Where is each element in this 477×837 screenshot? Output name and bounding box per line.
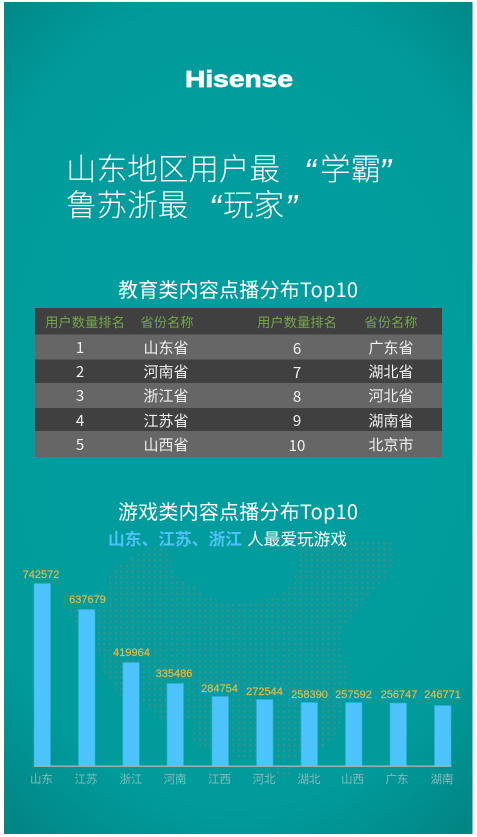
heading: education top 10: 教育类内容点播分布Top10 <box>118 274 358 303</box>
table header: 省份名称 <box>140 312 194 331</box>
axis labels <box>30 771 454 787</box>
title: 玩家 <box>223 181 284 225</box>
title: 山东地区用户最 <box>66 145 280 189</box>
value labels: 258390 <box>291 689 328 701</box>
table header: 省份名称 <box>364 312 418 331</box>
table header: 用户数量排名 <box>257 312 337 331</box>
title: “ <box>209 187 223 228</box>
table rows: 9 <box>293 410 301 431</box>
bars <box>34 584 451 766</box>
table rows: 8 <box>293 386 301 407</box>
table rows: 湖南省 <box>368 410 414 431</box>
table: education ranking <box>35 308 442 457</box>
title: ” <box>285 187 299 228</box>
title <box>66 145 393 228</box>
value labels: 742572 <box>23 569 59 581</box>
axis labels: 湖北 <box>298 771 321 787</box>
table rows: 山东省 <box>143 337 189 358</box>
subheading: 山东、江苏、浙江 <box>108 526 242 550</box>
table rows: 3 <box>76 385 84 406</box>
value labels: 284754 <box>201 683 238 695</box>
title: “ <box>304 151 318 192</box>
logo: Hisense: Hisense <box>185 66 293 92</box>
title: 学霸 <box>320 145 381 189</box>
table header <box>45 312 418 331</box>
table rows: 浙江省 <box>143 385 189 406</box>
title: ” <box>379 151 393 192</box>
value labels: 257592 <box>335 689 372 701</box>
value labels <box>23 569 461 701</box>
axis labels: 山东 <box>30 771 53 787</box>
table rows: 5 <box>76 434 84 455</box>
value labels: 246771 <box>424 689 461 701</box>
axis labels: 湖南 <box>430 771 454 787</box>
title: 鲁苏浙最 <box>66 181 188 225</box>
axis labels: 河南 <box>164 771 186 787</box>
heading: games top 10: 游戏类内容点播分布Top10 <box>118 496 358 525</box>
baseline axis <box>34 766 452 767</box>
axis labels: 广东 <box>386 771 408 787</box>
axis labels: 江西 <box>208 771 231 787</box>
table rows: 山西省 <box>143 434 189 455</box>
table rows: 河北省 <box>368 385 414 406</box>
table rows: 7 <box>293 362 301 383</box>
bar chart <box>23 569 461 787</box>
table rows <box>76 337 414 456</box>
table rows: 1 <box>76 337 84 358</box>
value labels: 637679 <box>69 594 106 606</box>
table rows: 河南省 <box>143 361 189 382</box>
axis labels: 山西 <box>341 771 364 787</box>
value labels: 256747 <box>381 689 417 701</box>
value labels: 335486 <box>156 668 192 680</box>
subheading: 人最爱玩游戏 <box>247 526 347 550</box>
dotted China map <box>68 541 393 778</box>
axis labels: 河北 <box>252 771 276 787</box>
axis labels: 浙江 <box>120 771 143 787</box>
table rows: 6 <box>293 338 301 359</box>
table rows: 10 <box>289 435 305 456</box>
table rows: 湖北省 <box>368 361 414 382</box>
value labels: 419964 <box>113 647 150 659</box>
table rows: 4 <box>76 410 84 431</box>
table rows: 北京市 <box>368 434 414 455</box>
table header: 用户数量排名 <box>45 312 125 331</box>
value labels: 272544 <box>246 686 283 698</box>
table rows: 2 <box>76 361 84 382</box>
table rows: 广东省 <box>368 337 414 358</box>
axis labels: 江苏 <box>74 771 98 787</box>
table rows: 江苏省 <box>143 410 189 431</box>
subheading <box>108 526 347 550</box>
